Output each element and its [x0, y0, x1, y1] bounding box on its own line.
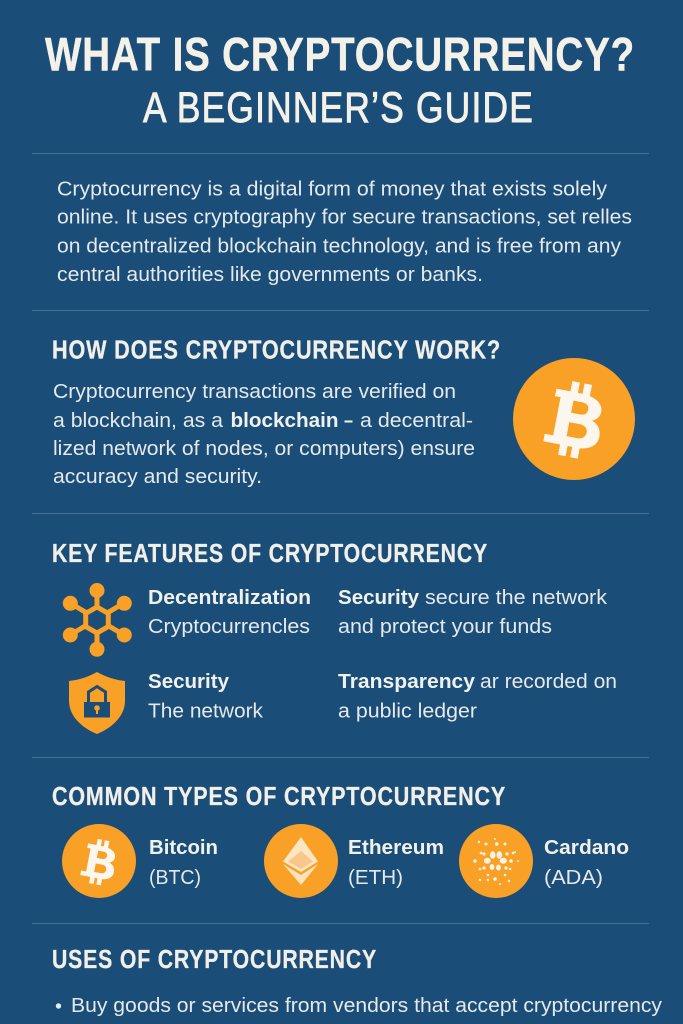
feature: security the network [148, 671, 264, 722]
feature: decentralization [148, 587, 311, 638]
feature: security secure the network: secure the network [425, 587, 608, 609]
how it works text block: accuracy and security. [53, 466, 262, 488]
icon: decentralized network [63, 583, 132, 657]
feature: security secure the network: and protect your funds [338, 616, 552, 638]
label: cardano: Cardano [544, 837, 629, 859]
intro text block: online. It uses cryptography for secure transactions, set relles [57, 206, 632, 228]
feature: transparency [338, 671, 617, 722]
icon: cardano coin [459, 824, 533, 898]
label: cardano [544, 837, 629, 889]
label: bitcoin: Bitcoin [149, 837, 218, 859]
how it works text block: blockchain [230, 410, 338, 432]
intro text block: on decentralized blockchain technology, and is free from any [57, 236, 621, 258]
label: ethereum: Ethereum [348, 837, 444, 859]
label: ethereum [348, 837, 444, 889]
label: bitcoin [149, 837, 218, 889]
heading: common types: COMMON TYPES OF CRYPTOCURRENCY [52, 783, 506, 811]
feature: security the network: The network [148, 700, 264, 722]
heading: how does cryptocurrency work: HOW DOES CRYPTOCURRENCY WORK? [52, 336, 501, 364]
intro text block: Cryptocurrency is a digital form of money that exists solely [57, 178, 607, 200]
how it works text block [53, 381, 475, 488]
feature: transparency: a public ledger [338, 700, 477, 722]
label: bitcoin: (BTC) [149, 867, 201, 889]
feature: security secure the network: Security [338, 587, 420, 609]
intro text block [57, 178, 632, 286]
label: cardano: (ADA) [544, 867, 603, 889]
how it works text block: lized network of nodes, or computers) ensure [53, 438, 475, 460]
icon: bitcoin coin [62, 824, 136, 898]
title: A BEGINNER’S GUIDE [143, 84, 534, 132]
icon: ethereum coin [264, 824, 338, 898]
feature: decentralization: Cryptocurrencles [148, 616, 310, 638]
heading: uses of cryptocurrency: USES OF CRYPTOCURRENCY [52, 946, 377, 974]
how it works text block: – [344, 410, 353, 432]
feature: security secure the network [338, 587, 608, 638]
how it works text block: a blockchain, as a [53, 410, 224, 432]
icon: large bitcoin coin [513, 358, 635, 480]
heading: key features: KEY FEATURES OF CRYPTOCURRENCY [52, 540, 488, 568]
title [45, 28, 635, 132]
feature: security the network: Security [148, 671, 230, 693]
feature: decentralization: Decentralization [148, 587, 311, 609]
feature: transparency: Transparency [338, 671, 476, 693]
intro text block: central authorities like governments or banks. [57, 264, 483, 286]
how it works text block: Cryptocurrency transactions are verified on [53, 381, 456, 403]
icon: security shield with padlock [69, 672, 125, 734]
how it works text block: a decentral- [360, 410, 473, 432]
bullet item: buy goods: Buy goods or services from vendors that accept cryptocurrency [71, 995, 662, 1017]
label: ethereum: (ETH) [348, 867, 403, 889]
feature: transparency: ar recorded on [480, 671, 617, 693]
